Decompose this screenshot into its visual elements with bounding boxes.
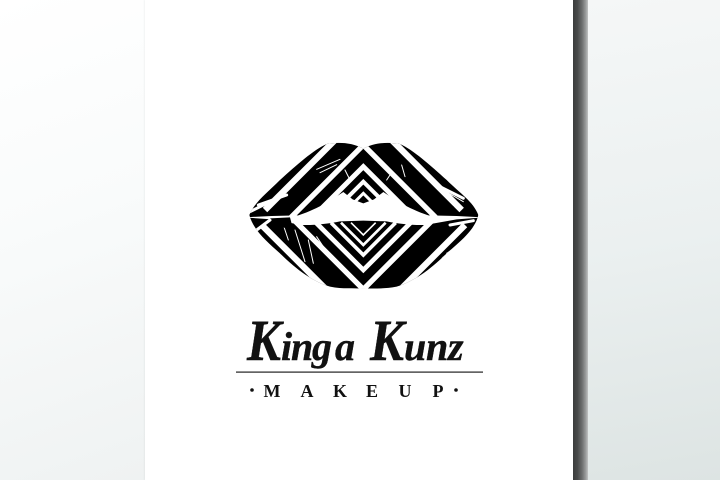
background: right wall <box>588 0 720 480</box>
paper drop shadow <box>573 0 588 480</box>
title: Kinga Kunz script wordmark: inga <box>281 324 355 369</box>
logo artwork <box>236 142 483 397</box>
distress marks <box>250 159 473 263</box>
divider rule <box>236 372 483 373</box>
subtitle: MAKEUP with dots: P <box>432 381 444 401</box>
subtitle: MAKEUP with dots: E <box>366 381 378 401</box>
subtitle: MAKEUP with dots <box>250 381 458 401</box>
subtitle: MAKEUP with dots: U <box>398 381 412 401</box>
title: Kinga Kunz script wordmark <box>246 308 464 373</box>
icon: striped lips <box>249 142 478 289</box>
panel: white paper sheet <box>145 0 573 480</box>
subtitle: MAKEUP with dots: K <box>333 381 347 401</box>
mouth opening <box>243 192 483 225</box>
title: Kinga Kunz script wordmark: unz <box>404 324 464 369</box>
subtitle: MAKEUP with dots: M <box>264 381 280 401</box>
background: left wall <box>0 0 146 480</box>
title: Kinga Kunz script wordmark: K <box>246 308 284 373</box>
subtitle: MAKEUP with dots: A <box>300 381 314 401</box>
title: Kinga Kunz script wordmark: K <box>369 308 407 373</box>
